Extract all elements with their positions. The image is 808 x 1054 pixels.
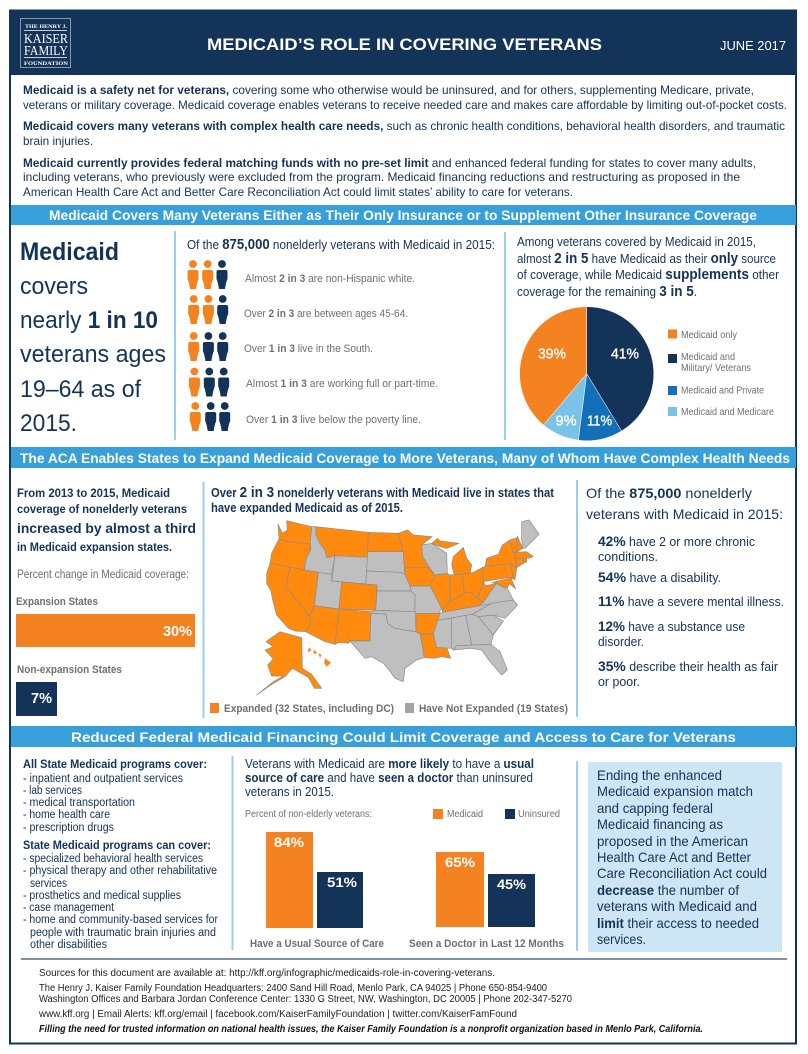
pie chart: 41% (611, 346, 639, 362)
callout: 1 in 10 veterans (20, 238, 166, 437)
callout: 1 in 10 veterans: nearly 1 in 10 (20, 307, 158, 334)
row: non-Hispanic white (188, 260, 415, 289)
callout: financing impact: services. (597, 931, 646, 947)
callout: financing impact: Ending the enhanced (597, 767, 722, 783)
row: poverty line (190, 402, 421, 431)
map legend (210, 703, 568, 715)
list: optional programs: State Medicaid programs can cover: (23, 838, 211, 852)
demographics heading: Of the 875,000 nonelderly veterans with Medicaid in 2015: (187, 237, 495, 253)
list: all state programs (23, 757, 207, 834)
list: optional programs: other disabilities (30, 939, 107, 951)
list: optional programs: services (30, 878, 67, 890)
callout: financing impact: proposed in the American (597, 833, 748, 849)
callout: financing impact: veterans with Medicaid and (597, 898, 757, 914)
bars: seen a doctor: Seen a Doctor in Last 12 Months (409, 938, 564, 950)
bars: usual source of care: Have a Usual Source of Care (250, 938, 384, 950)
logo: Kaiser Family Foundation: KAISER (24, 32, 69, 47)
date: JUNE 2017 (720, 38, 786, 53)
section heading: financing: Reduced Federal Medicaid Financing Could Limit Coverage and Access to Care for Veterans (71, 729, 736, 745)
list: optional programs: - physical therapy and other rehabilitative (23, 865, 217, 877)
header banner (10, 10, 797, 75)
panel: expansion map (210, 484, 568, 715)
row: live in the South: Over 1 in 3 live in the South. (244, 343, 373, 355)
needs statistics: 12% have a substance use (598, 618, 745, 634)
chart legend: Uninsured (518, 809, 560, 820)
coverage text: Among veterans covered by Medicaid in 2015, (517, 234, 756, 249)
callout: financing impact: limit their access to needed (597, 915, 759, 931)
bar: expansion states (16, 596, 195, 647)
panel: access to care chart (245, 757, 564, 950)
needs statistics: conditions. (598, 550, 658, 564)
list: all state programs: - prescription drugs (23, 822, 114, 834)
panel: covered services lists (23, 757, 218, 951)
panel: complex health needs (586, 485, 784, 689)
logo: Kaiser Family Foundation: FAMILY (24, 44, 68, 59)
callout: financing impact (588, 762, 782, 952)
bar: expansion states: 30% (163, 623, 192, 640)
expansion text (17, 486, 196, 554)
pie chart: 9% (556, 412, 576, 430)
chart legend: Medicaid (447, 809, 483, 820)
access text: Veterans with Medicaid are more likely to have a usual (245, 757, 534, 771)
intro text block: Medicaid currently provides federal matching funds with no pre-set limit and enhanced federal funding for states to cover many adults, (23, 156, 756, 170)
coverage text: almost 2 in 5 have Medicaid as their only source (517, 250, 776, 267)
panel: demographics of veterans with Medicaid (187, 237, 495, 431)
needs statistics: 35% describe their health as fair (598, 658, 778, 674)
map heading: have expanded Medicaid as of 2015. (211, 501, 403, 515)
needs statistics (598, 533, 784, 689)
footer: sources and contact: Filling the need for trusted information on national health issues, the Kaiser Family Foundation is a nonprofit organization based in Menlo Park, California. (39, 1024, 703, 1035)
intro text block (23, 83, 787, 199)
list: all state programs: - inpatient and outpatient services (23, 773, 183, 785)
list: all state programs: - lab services (23, 785, 82, 797)
intro text block: Medicaid covers many veterans with complex health care needs, such as chronic health conditions, behavioral health disorders, and traumatic (23, 119, 785, 133)
expansion text: From 2013 to 2015, Medicaid (17, 486, 170, 500)
pie legend: Medicaid only (681, 329, 738, 341)
list: optional programs: - specialized behavioral health services (23, 853, 203, 865)
panel: access to care chart: Percent of non-elderly veterans: (245, 809, 372, 820)
list: optional programs: - prosthetics and medical supplies (23, 890, 181, 902)
row: ages 45-64 (188, 295, 408, 324)
list: optional programs (23, 838, 218, 951)
bar: non-expansion states: 7% (31, 690, 52, 707)
bar: expansion states: Expansion States (16, 596, 98, 608)
section heading: financing (11, 726, 796, 747)
needs statistics: 54% have a disability. (598, 569, 721, 585)
footer: sources and contact (38, 968, 703, 1035)
pie legend: Medicaid and Medicare (681, 406, 774, 418)
intro text block: including veterans, who previously were excluded from the program. Medicaid financing reductions and restructuring as proposed in the (23, 170, 740, 184)
bars: seen a doctor (409, 852, 564, 950)
chart legend (433, 809, 560, 820)
list: all state programs: - medical transportation (23, 797, 135, 809)
bars: usual source of care: 84% (274, 834, 305, 850)
expansion text: coverage of nonelderly veterans (17, 502, 187, 516)
pie legend: Medicaid and (681, 351, 735, 363)
list: all state programs: - home health care (23, 809, 110, 821)
list: optional programs: - home and community-based services for (23, 914, 218, 926)
coverage text: of coverage, while Medicaid supplements other (517, 266, 780, 283)
logo: Kaiser Family Foundation: FOUNDATION (24, 61, 68, 67)
logo: Kaiser Family Foundation: THE HENRY J. (25, 24, 68, 30)
pie legend: Medicaid and Private (681, 384, 764, 396)
callout: 1 in 10 veterans: 2015. (20, 410, 77, 437)
logo: Kaiser Family Foundation (20, 18, 70, 68)
section heading: ACA: The ACA Enables States to Expand Medicaid Coverage to More Veterans, Many of Whom Have Complex Health Needs (20, 450, 790, 466)
footer: sources and contact: Washington Offices and Barbara Jordan Conference Center: 1330 G Street, NW, Washington, DC 20005 | Phone 202-347-5270 (39, 994, 572, 1005)
row: working (189, 368, 438, 396)
title: MEDICAID’S ROLE IN COVERING VETERANS (207, 35, 602, 54)
needs statistics: or poor. (598, 675, 640, 689)
map heading (211, 484, 555, 515)
callout: financing impact: Medicaid financing as (597, 816, 723, 832)
footer: sources and contact: Sources for this document are available at: http://kff.org/infographic/medicaids-role-in-covering-veterans. (39, 968, 495, 979)
footer: sources and contact: The Henry J. Kaiser Family Foundation Headquarters: 2400 Sand Hill Road, Menlo Park, CA 94025 | Phone 650-854-9400 (39, 983, 547, 994)
callout: financing impact: decrease the number of (597, 882, 739, 898)
needs heading: veterans with Medicaid in 2015: (586, 506, 783, 522)
bars: usual source of care: 51% (327, 874, 358, 890)
intro text block: veterans or military coverage. Medicaid coverage enables veterans to receive needed care and makes care affordable by limiting out-of-pocket costs. (23, 98, 787, 112)
row: poverty line: Over 1 in 3 live below the poverty line. (246, 414, 421, 426)
row: ages 45-64: Over 2 in 3 are between ages 45-64. (244, 308, 408, 320)
pie legend: Military/ Veterans (681, 362, 751, 374)
bars: seen a doctor: 65% (445, 854, 476, 870)
callout: financing impact: Care Reconciliation Act could (597, 865, 767, 881)
section heading: coverage: Medicaid Covers Many Veterans Either as Their Only Insurance or to Supplement Other Insurance Coverage (49, 207, 757, 223)
intro text block: American Health Care Act and Better Care Reconciliation Act could limit states’ ability to care for veterans. (23, 185, 573, 199)
coverage text (517, 234, 780, 300)
callout: financing impact: Health Care Act and Better (597, 849, 751, 865)
pie legend (668, 329, 774, 418)
pie chart: 11% (587, 412, 612, 430)
footer: sources and contact: www.kff.org | Email Alerts: kff.org/email | facebook.com/KaiserFamilyFoundation | twitter.com/KaiserFamFound (38, 1009, 517, 1020)
map heading: Over 2 in 3 nonelderly veterans with Medicaid live in states that (211, 484, 555, 501)
pie chart: 39% (538, 346, 566, 362)
needs heading: Of the 875,000 nonelderly (586, 485, 752, 501)
US map (257, 520, 539, 695)
pie chart (520, 307, 654, 441)
needs statistics: disorder. (598, 635, 644, 649)
bars: usual source of care (250, 832, 384, 950)
row: non-Hispanic white: Almost 2 in 3 are non-Hispanic white. (245, 273, 415, 285)
callout: 1 in 10 veterans: covers (20, 273, 88, 300)
panel: percent change in Medicaid coverage: Percent change in Medicaid coverage: (17, 569, 189, 581)
map legend: Expanded (32 States, including DC) (224, 703, 394, 715)
bar: non-expansion states: Non-expansion States (17, 664, 122, 676)
bars: seen a doctor: 45% (497, 876, 527, 892)
callout: 1 in 10 veterans: Medicaid (20, 238, 119, 266)
access text: source of care and have seen a doctor than uninsured (245, 771, 533, 785)
list: optional programs: - case management (23, 902, 115, 914)
list: all state programs: All State Medicaid programs cover: (23, 757, 207, 771)
row: live in the South (188, 332, 373, 361)
callout: 1 in 10 veterans: 19–64 as of (20, 376, 141, 403)
panel: source of coverage (517, 234, 780, 441)
intro text block: Medicaid is a safety net for veterans, covering some who otherwise would be uninsured, and for others, supplementing Medicare, private, (23, 83, 754, 97)
access text (245, 757, 534, 799)
list: optional programs: people with traumatic brain injuries and (30, 927, 216, 939)
intro text block: brain injuries. (23, 134, 93, 148)
needs statistics: 11% have a severe mental illness. (598, 593, 784, 609)
needs statistics: 42% have 2 or more chronic (598, 533, 755, 549)
callout: financing impact: Medicaid expansion match (597, 783, 753, 799)
coverage text: coverage for the remaining 3 in 5. (517, 283, 697, 300)
access text: veterans in 2015. (245, 785, 334, 799)
callout: 1 in 10 veterans: veterans ages (20, 341, 166, 368)
bar: non-expansion states (16, 664, 122, 716)
expansion text: increased by almost a third (17, 520, 196, 536)
panel: percent change in Medicaid coverage (16, 486, 196, 716)
expansion text: in Medicaid expansion states. (17, 540, 172, 554)
map legend: Have Not Expanded (19 States) (419, 703, 568, 715)
row: working: Almost 1 in 3 are working full or part-time. (246, 378, 438, 390)
callout: financing impact: and capping federal (597, 800, 713, 816)
needs heading (586, 485, 783, 522)
